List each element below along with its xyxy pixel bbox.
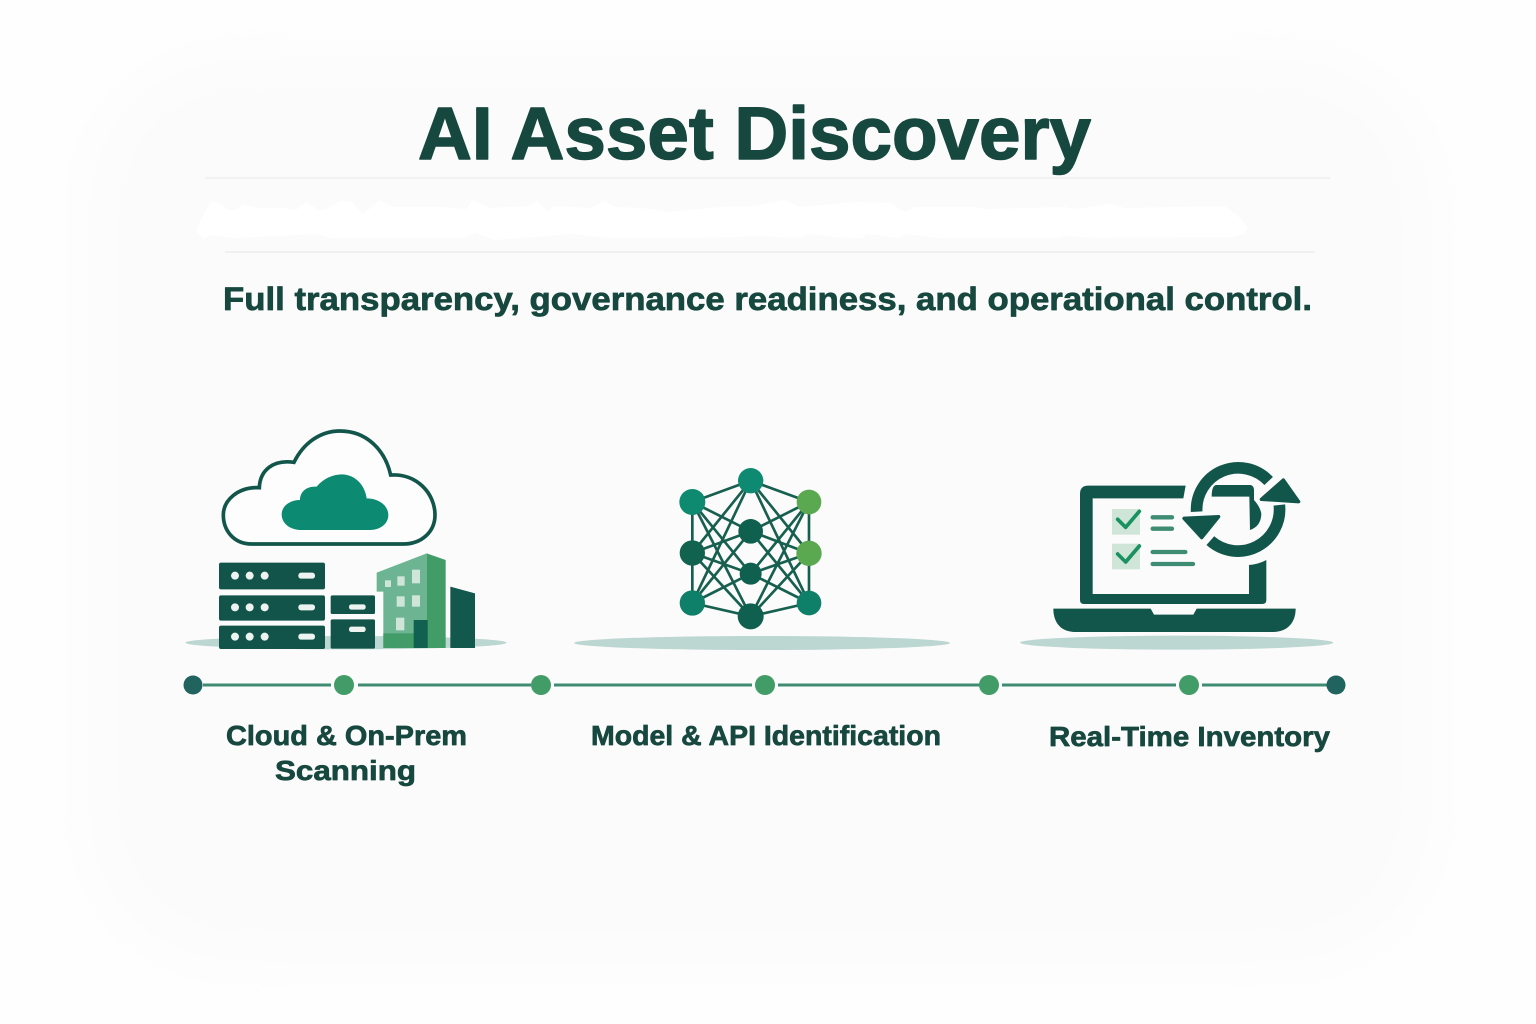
office building (377, 553, 475, 648)
ground shadow (1020, 636, 1333, 650)
ground shadow: network (574, 636, 950, 650)
timeline (184, 675, 1346, 695)
icon: cloud and on-prem infrastructure (185, 431, 507, 649)
network edges (692, 481, 809, 616)
icon: neural network (679, 468, 822, 629)
network nodes (679, 468, 822, 629)
checklist (1112, 509, 1193, 569)
refresh arrows (1184, 468, 1299, 551)
cloud outline (223, 431, 435, 544)
inner cloud (282, 474, 388, 530)
small server units (331, 595, 375, 649)
label: cloud and on-prem scanning (226, 720, 467, 786)
label: cloud and on-prem scanning: Cloud & On-Prem (226, 720, 467, 751)
laptop screen frame (1080, 486, 1266, 604)
subtitle: Full transparency, governance readiness, and operational control. (223, 281, 1312, 317)
title: AI Asset Discovery (418, 92, 1091, 175)
laptop base (1053, 609, 1296, 632)
label: cloud and on-prem scanning: Scanning (275, 755, 416, 786)
server rack (219, 563, 325, 649)
icon: laptop with checklist and refresh (1020, 468, 1333, 650)
label: real-time inventory: Real-Time Inventory (1049, 721, 1330, 752)
label: model and API identification: Model & API Identification (591, 720, 941, 751)
ground shadow (185, 636, 507, 649)
